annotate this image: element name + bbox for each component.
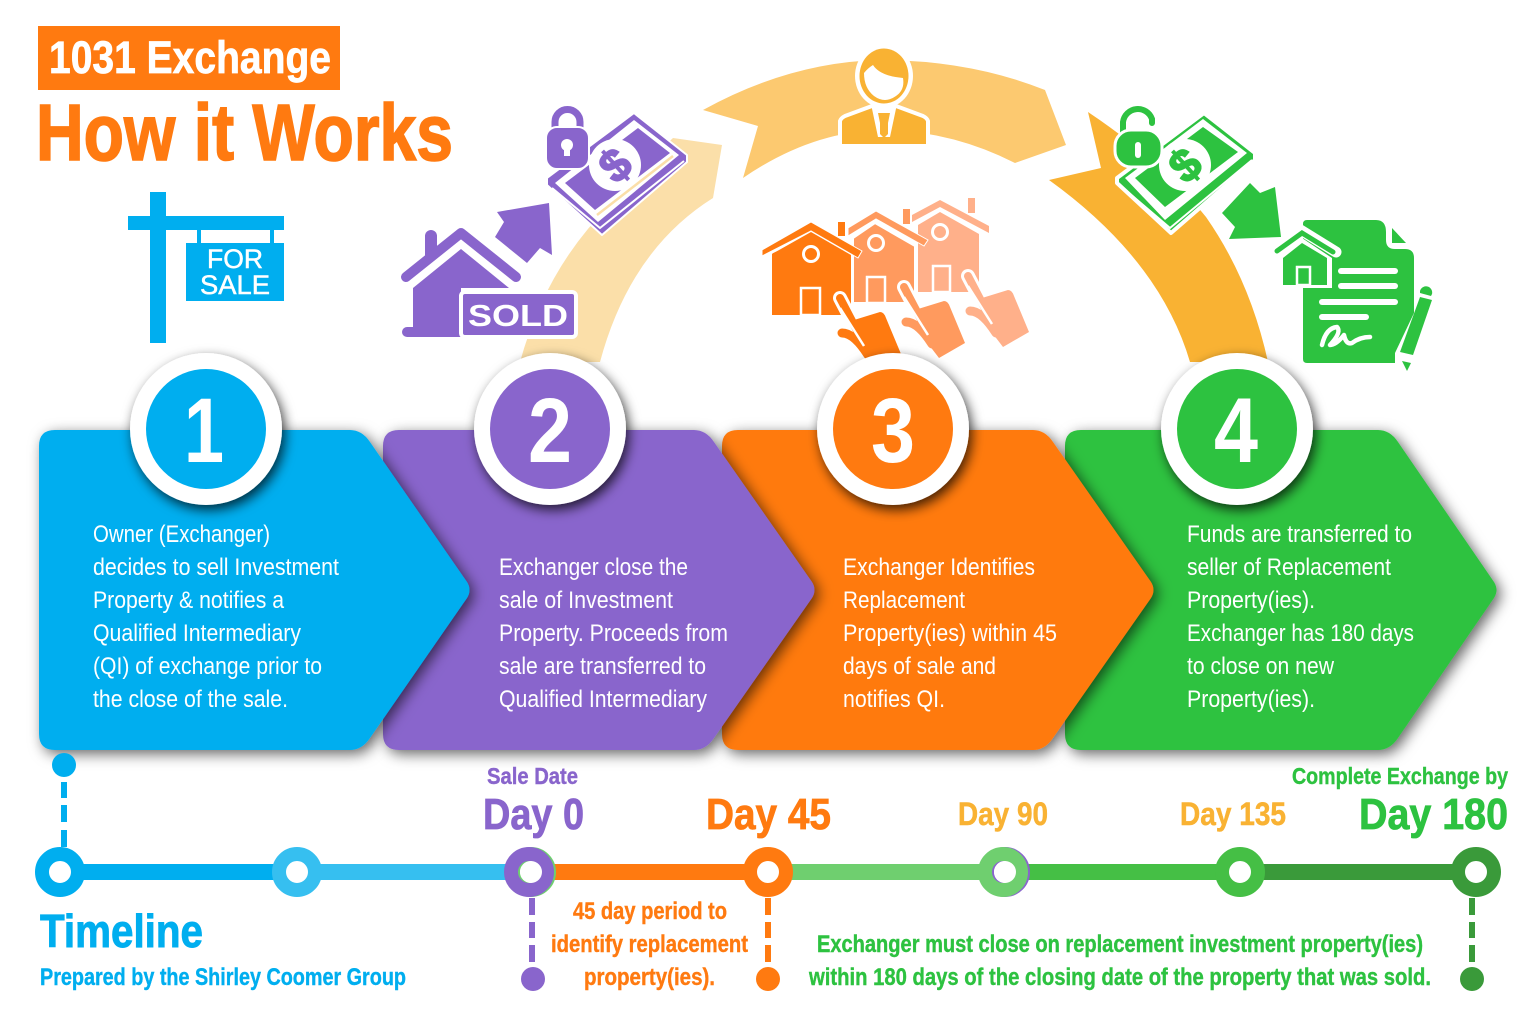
text: step 4 description: Property(ies). (1187, 587, 1315, 614)
text: step 2 description: Property. Proceeds from (499, 620, 728, 647)
icon: house three (912, 198, 989, 292)
step badge 1 (130, 353, 282, 505)
note: 45 day period: 45 day period to (573, 898, 727, 925)
icon: house one (762, 222, 862, 315)
icon: hand three (968, 276, 1029, 347)
step badge 3 (817, 353, 969, 505)
panel: step 2 (383, 430, 814, 750)
timeline node: quarter (279, 854, 315, 890)
note: 45 day period: identify replacement (551, 931, 748, 958)
person suit (840, 104, 928, 146)
arrow: middle arc over qualified intermediary (703, 60, 1066, 178)
label: day 45: Day 45 (706, 790, 831, 839)
icon: qualified intermediary person (840, 44, 928, 146)
text: step 4 description: to close on new (1187, 653, 1335, 680)
text: step 2 description: sale are transferred to (499, 653, 706, 680)
icon: green down arrow (1222, 183, 1281, 239)
step badge 4: 4 (1214, 380, 1258, 482)
timeline node: day 135 (1222, 854, 1258, 890)
icon: hand one (840, 298, 901, 369)
label: day 135: Day 135 (1180, 796, 1286, 832)
icon: padlock (546, 110, 589, 169)
note: 180 day close: within 180 days of the closing date of the property that was sold. (808, 964, 1431, 991)
text: step 2 description (499, 554, 728, 713)
note: 180 day close: Exchanger must close on replacement investment property(ies) (817, 931, 1423, 958)
icon: stack of cash (547, 113, 687, 235)
panel: step 3 (722, 430, 1154, 750)
heading: timeline: Prepared by the Shirley Coomer Group (40, 964, 406, 991)
icon: sold house (402, 230, 576, 337)
icon: for sale sign: SALE (200, 270, 270, 300)
timeline node: day 0 (511, 854, 549, 890)
text: step 3 description: Replacement (843, 587, 965, 614)
title block (36, 26, 453, 177)
marker: day 45 connector (756, 898, 780, 991)
step badge 1: 1 (184, 380, 224, 482)
note: 45 day period: property(ies). (584, 964, 715, 991)
icon: for sale sign: FOR (207, 244, 263, 274)
label: sale date: Sale Date (487, 763, 578, 789)
timeline node: day 180 (1458, 854, 1494, 890)
timeline node: day 45 (750, 854, 786, 890)
step badge 4 (1161, 353, 1313, 505)
text: step 1 description: the close of the sale. (93, 686, 288, 713)
text: step 1 description (93, 521, 339, 713)
text: step 4 description: Funds are transferred to (1187, 521, 1412, 548)
icon: open padlock (1115, 109, 1162, 167)
icon: for sale sign (128, 192, 284, 343)
panel: step 4 (1065, 430, 1496, 750)
icon: sold house: SOLD (468, 298, 568, 333)
text: step 3 description: Exchanger Identifies (843, 554, 1035, 581)
icon: contract document (1303, 220, 1414, 363)
marker: day 0 connector (521, 898, 545, 991)
label: complete exchange by day 180: Day 180 (1359, 790, 1508, 839)
text: step 4 description (1187, 521, 1414, 713)
timeline track (42, 854, 1494, 890)
arrow: arc into step 4 (1049, 112, 1268, 362)
marker: day 180 connector (1460, 898, 1484, 991)
timeline node: day 90 (985, 854, 1023, 890)
text: step 4 description: Property(ies). (1187, 686, 1315, 713)
label: complete exchange by day 180 (1292, 763, 1508, 839)
icon: stack of cash: $ (588, 137, 642, 193)
icon: stack of cash green (1117, 113, 1255, 233)
step badge 2: 2 (528, 380, 572, 482)
text: step 3 description: Property(ies) within 45 (843, 620, 1057, 647)
icon: pencil (1400, 286, 1432, 371)
text: step 1 description: Property & notifies a (93, 587, 285, 614)
text: step 4 description: Exchanger has 180 days (1187, 620, 1414, 647)
icon: sold house, arrow, lock and cash (402, 110, 687, 337)
text: step 3 description: days of sale and (843, 653, 996, 680)
label: sale date: Day 0 (483, 790, 584, 839)
text: step 2 description: Exchanger close the (499, 554, 688, 581)
person head (855, 44, 913, 108)
note: 45 day period (551, 898, 748, 991)
arrow: pale arc from step 2 (520, 138, 722, 362)
icon: three houses with pointing hands (762, 198, 1029, 369)
note: 180 day close (808, 931, 1431, 991)
text: step 2 description: Qualified Intermediary (499, 686, 707, 713)
heading: timeline: Timeline (40, 905, 203, 957)
label: sale date (483, 763, 584, 839)
text: step 1 description: Qualified Intermediary (93, 620, 301, 647)
timeline segments (60, 864, 1476, 880)
step badge 2 (474, 353, 626, 505)
timeline node: start (42, 854, 78, 890)
text: step 1 description: decides to sell Investment (93, 554, 339, 581)
icon: stack of cash green: $ (1158, 137, 1212, 193)
icon: hand two (904, 287, 965, 358)
main heading: How it Works (36, 88, 453, 177)
icon: house on contract (1274, 231, 1336, 288)
text: step 4 description: seller of Replacement (1187, 554, 1391, 581)
title badge: 1031 Exchange (49, 32, 331, 83)
text: step 3 description (843, 554, 1057, 713)
text: step 1 description: (QI) of exchange prior to (93, 653, 322, 680)
text: step 1 description: Owner (Exchanger) (93, 521, 270, 548)
marker: start connector (52, 753, 76, 847)
label: day 90: Day 90 (958, 796, 1048, 832)
text: step 3 description: notifies QI. (843, 686, 945, 713)
heading: timeline (40, 905, 406, 991)
icon: purple up arrow (495, 203, 552, 263)
icon: unlocked cash, arrow and contract (1115, 109, 1432, 371)
icon: house two (848, 209, 928, 303)
text: step 2 description: sale of Investment (499, 587, 673, 614)
step badge 3: 3 (871, 380, 915, 482)
panel: step 1 (39, 430, 470, 750)
